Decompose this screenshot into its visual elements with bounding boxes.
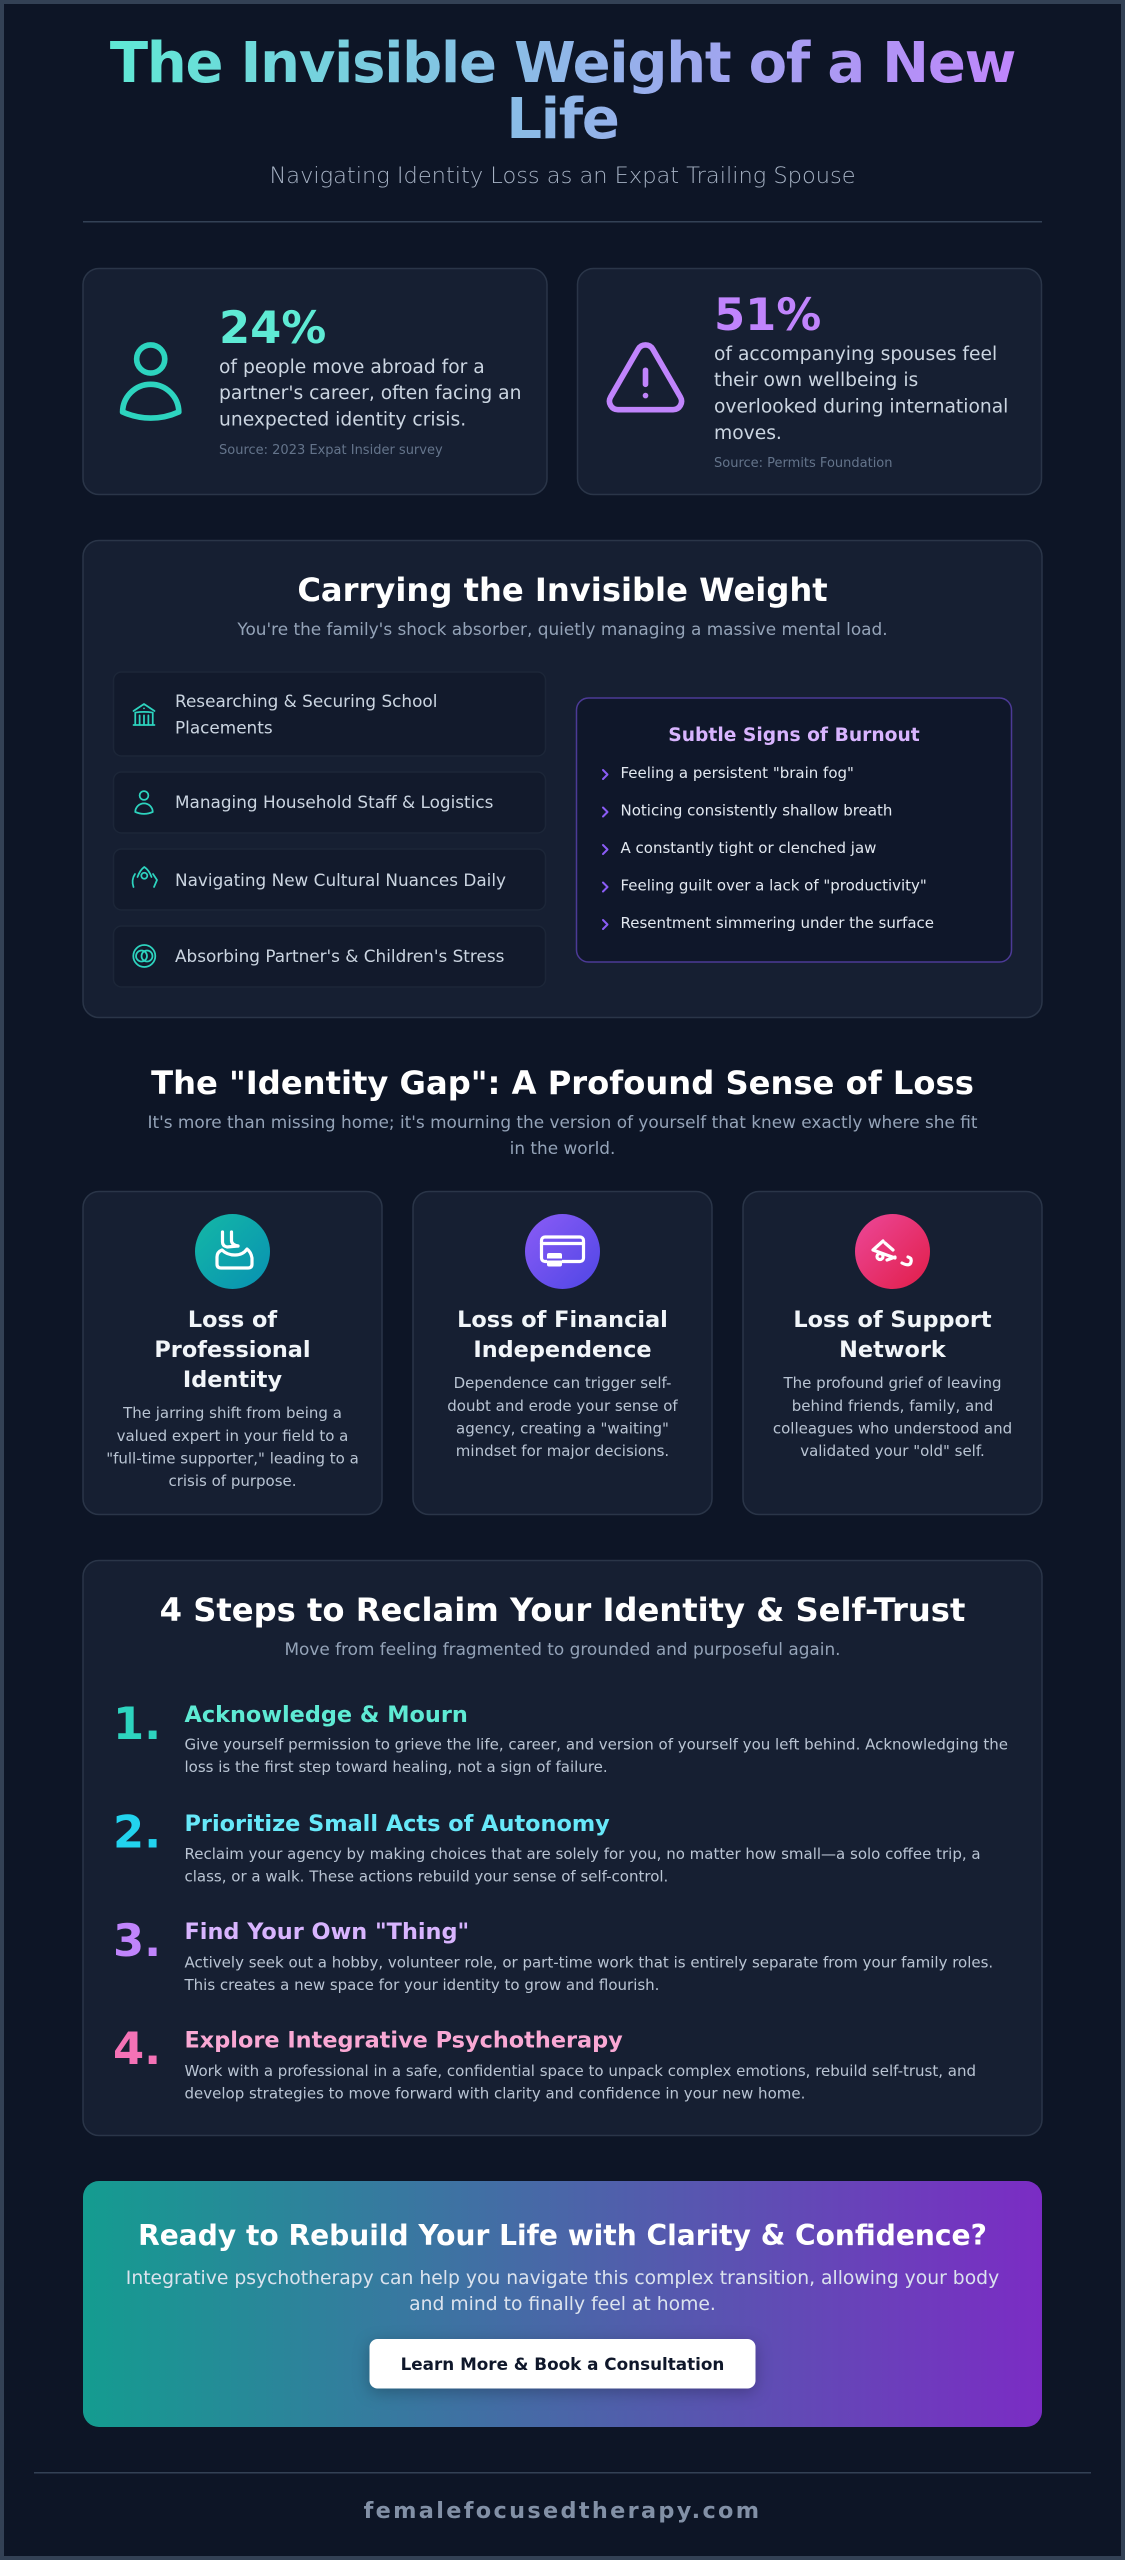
step 2: Reclaim your agency by making choices that are solely for you, no matter how small—a solo coffee trip, a — [184, 1845, 981, 1863]
burnout signs list: Feeling a persistent "brain fog" — [620, 764, 854, 782]
panel: call to action — [83, 2181, 1042, 2427]
stat description: of accompanying spouses feel — [714, 344, 997, 365]
step 3 — [113, 1914, 993, 1994]
cta heading: Ready to Rebuild Your Life with Clarity & Confidence? — [138, 2219, 987, 2252]
step 1: Acknowledge & Mourn — [184, 1702, 468, 1728]
panel: stat 24% — [83, 268, 547, 494]
cta text: and mind to finally feel at home. — [409, 2294, 716, 2315]
stat number: 51% — [714, 288, 821, 341]
footer url: femalefocusedtherapy.com — [364, 2498, 761, 2524]
stat description: unexpected identity crisis. — [219, 410, 466, 430]
stat description: overlooked during international — [714, 396, 1008, 418]
step 3: This creates a new space for your identity to grow and flourish. — [184, 1976, 659, 1994]
list item: household staff — [114, 772, 546, 833]
panel: loss of support network: Network — [839, 1337, 947, 1363]
burnout signs list: A constantly tight or clenched jaw — [620, 839, 876, 857]
identity gap subtitle: It's more than missing home; it's mourning the version of yourself that knew exactly where she fit — [148, 1112, 978, 1132]
list item: absorbing stress: Absorbing Partner's & Children's Stress — [175, 946, 504, 966]
stat description — [219, 357, 521, 430]
burnout signs list: Feeling guilt over a lack of "productivity" — [620, 876, 927, 894]
icon: warning triangle — [609, 345, 682, 410]
step 3: Find Your Own "Thing" — [184, 1919, 469, 1945]
step 2 — [113, 1806, 981, 1886]
panel: carrying the invisible weight — [83, 540, 1042, 1018]
step 4: Explore Integrative Psychotherapy — [184, 2028, 623, 2054]
description: mindset for major decisions. — [456, 1442, 669, 1460]
step 4: Work with a professional in a safe, confidential space to unpack complex emotions, rebuild self-trust, and — [184, 2062, 976, 2080]
list item: household staff: Managing Household Staff & Logistics — [175, 792, 493, 812]
description — [773, 1374, 1012, 1460]
panel: loss of financial independence: Independence — [473, 1337, 652, 1363]
description: colleagues who understood and — [773, 1420, 1012, 1438]
list item: school placements: Researching & Securing School — [175, 691, 437, 711]
stat description: their own wellbeing is — [714, 370, 918, 391]
list item: cultural nuances — [114, 849, 546, 910]
description — [106, 1404, 359, 1490]
description: "full-time supporter," leading to a — [106, 1450, 359, 1468]
step 4: 4. — [113, 2022, 161, 2075]
step 2: Prioritize Small Acts of Autonomy — [184, 1811, 610, 1837]
section subtitle: You're the family's shock absorber, quietly managing a massive mental load. — [236, 619, 888, 639]
description: behind friends, family, and — [792, 1397, 993, 1415]
callout: subtle signs of burnout — [576, 698, 1012, 962]
description: valued expert in your field to a — [117, 1427, 348, 1445]
panel: loss of support network — [743, 1192, 1042, 1514]
identity gap subtitle: in the world. — [510, 1138, 615, 1158]
step 4: develop strategies to move forward with clarity and confidence in your new home. — [184, 2084, 805, 2102]
step 1 — [113, 1697, 1008, 1776]
step 1: 1. — [113, 1697, 161, 1750]
panel: loss of professional identity — [83, 1192, 382, 1514]
stat description: moves. — [714, 423, 782, 444]
icon: inbox hand — [195, 1214, 270, 1289]
step 2: class, or a walk. These actions rebuild your sense of self-control. — [184, 1868, 668, 1886]
panel: 4 steps — [83, 1560, 1042, 2136]
panel: loss of professional identity: Loss of — [188, 1307, 277, 1333]
icon: navigating — [133, 867, 157, 887]
icon: building — [134, 704, 155, 725]
description: The profound grief of leaving — [783, 1374, 1001, 1392]
icon: credit card — [525, 1214, 600, 1289]
heading: identity gap: The "Identity Gap": A Profound Sense of Loss — [151, 1064, 974, 1102]
icon: person — [135, 791, 153, 814]
list item: cultural nuances: Navigating New Cultural Nuances Daily — [175, 870, 506, 890]
title: Life — [506, 87, 619, 152]
stat description — [714, 344, 1008, 444]
burnout signs list — [603, 764, 934, 932]
step 3: 3. — [113, 1914, 161, 1967]
step 1: loss is the first step toward healing, not a sign of failure. — [184, 1758, 608, 1776]
button — [370, 2339, 756, 2388]
burnout signs list: Resentment simmering under the surface — [620, 914, 934, 932]
list item: absorbing stress — [114, 926, 546, 987]
panel: loss of professional identity: Identity — [183, 1367, 282, 1393]
stat number: 24% — [219, 301, 326, 354]
panel: loss of professional identity: Professional — [154, 1337, 311, 1363]
stat description: partner's career, often facing an — [219, 383, 521, 404]
description — [447, 1374, 678, 1460]
description: doubt and erode your sense of — [447, 1397, 678, 1415]
icon: broken connection — [855, 1214, 930, 1289]
step 2: 2. — [113, 1806, 161, 1858]
panel: loss of financial independence: Loss of Financial — [457, 1307, 668, 1333]
cta text: Integrative psychotherapy can help you navigate this complex transition, allowing your body — [126, 2268, 999, 2289]
panel: loss of financial independence — [413, 1192, 712, 1514]
description: The jarring shift from being a — [122, 1404, 342, 1422]
heading: 4 Steps to Reclaim Your Identity & Self-Trust — [160, 1591, 965, 1629]
step 1: Give yourself permission to grieve the life, career, and version of yourself you left behind. Acknowledging the — [184, 1736, 1008, 1754]
description: Dependence can trigger self- — [454, 1374, 671, 1392]
source: Source: 2023 Expat Insider survey — [219, 443, 443, 458]
description: crisis of purpose. — [168, 1472, 297, 1490]
section subtitle: Move from feeling fragmented to grounded and purposeful again. — [284, 1639, 841, 1659]
list item: school placements — [114, 672, 546, 756]
description: validated your "old" self. — [800, 1442, 985, 1460]
cta text — [126, 2268, 999, 2315]
title — [110, 31, 1015, 152]
panel: stat 51% — [578, 268, 1042, 494]
icon: person — [123, 345, 179, 418]
list item: school placements: Placements — [175, 718, 273, 738]
title: The Invisible Weight of a New — [110, 31, 1015, 96]
icon: at symbol — [133, 945, 155, 967]
source: Source: Permits Foundation — [714, 456, 892, 471]
panel: loss of support network: Loss of Support — [793, 1307, 992, 1333]
step 4 — [113, 2022, 976, 2102]
button: Learn More & Book a Consultation — [401, 2354, 724, 2374]
step 3: Actively seek out a hobby, volunteer role, or part-time work that is entirely separate from your family roles. — [184, 1954, 993, 1972]
identity gap subtitle — [148, 1112, 978, 1158]
callout: subtle signs of burnout: Subtle Signs of Burnout — [668, 725, 920, 746]
heading: Carrying the Invisible Weight — [297, 571, 828, 609]
description: agency, creating a "waiting" — [456, 1420, 669, 1438]
stat description: of people move abroad for a — [219, 357, 485, 378]
burnout signs list: Noticing consistently shallow breath — [620, 802, 892, 820]
subtitle: Navigating Identity Loss as an Expat Trailing Spouse — [269, 163, 856, 189]
